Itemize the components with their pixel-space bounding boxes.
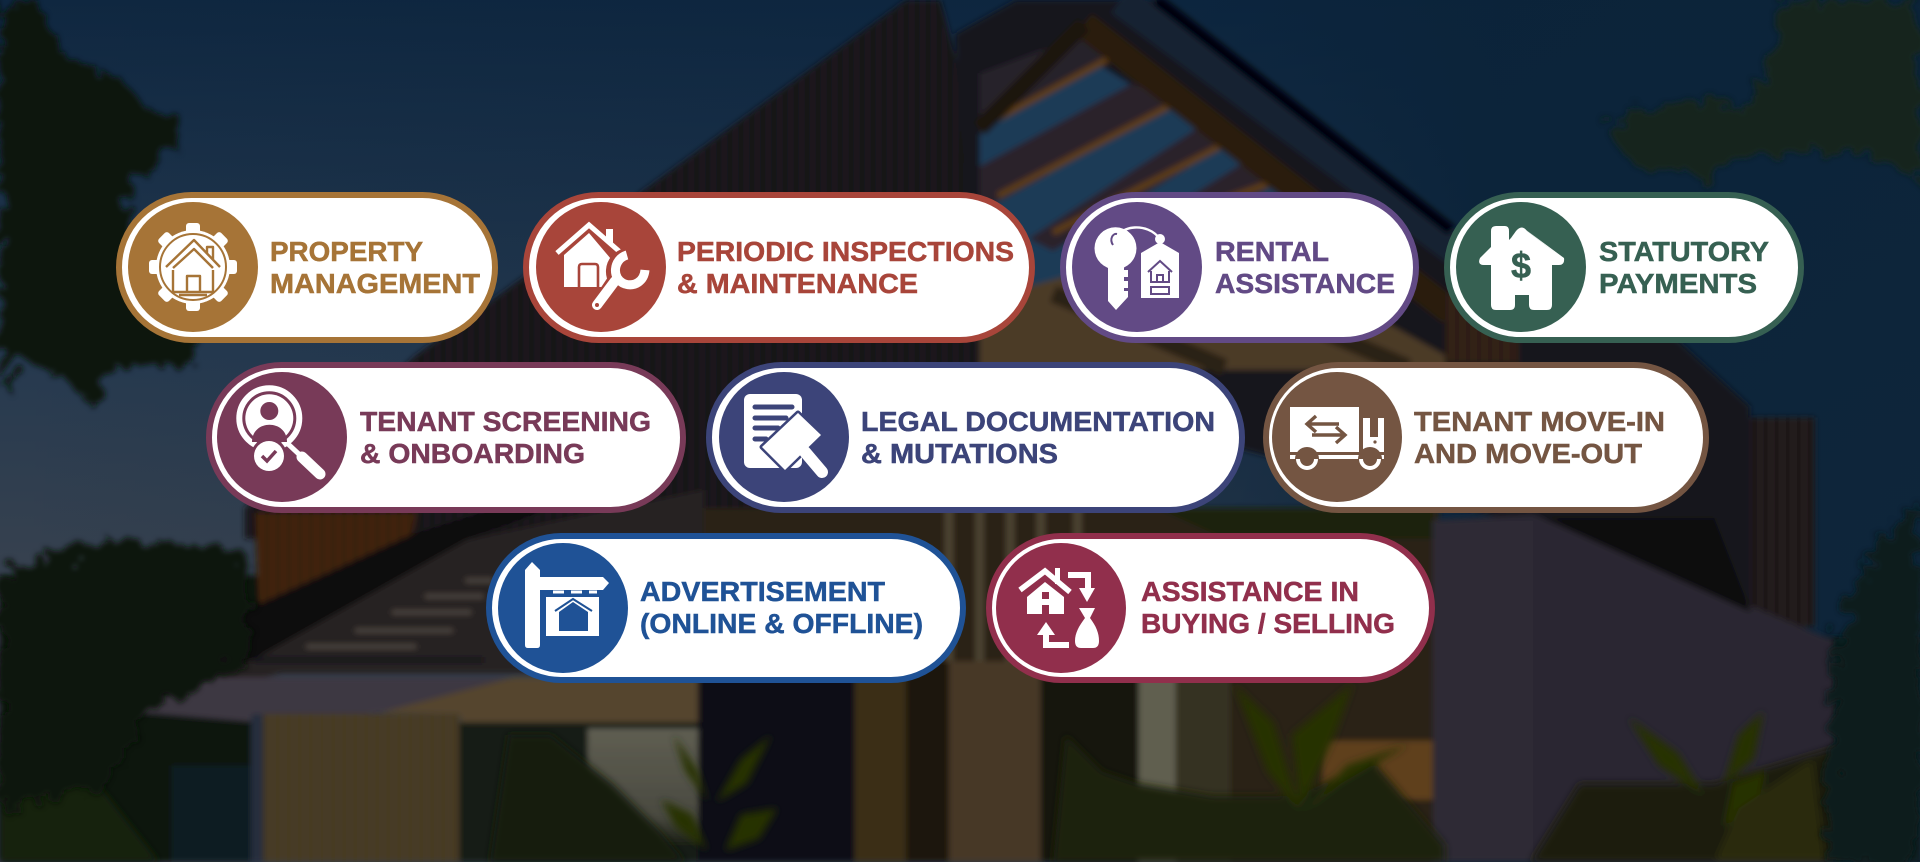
pill: statutory payments [1447,195,1801,340]
label [861,406,1215,469]
label: ASSISTANCE IN [1141,576,1359,607]
label [360,406,651,469]
label [1141,576,1395,639]
icon: magnifier with person [217,372,347,502]
label: (ONLINE & OFFLINE) [640,608,923,639]
label: ADVERTISEMENT [640,576,885,607]
label: MANAGEMENT [270,268,480,299]
label [640,576,923,639]
icon: house with dollar [1456,202,1586,332]
pill: legal documentation [709,365,1242,510]
icon: house with dollar: $ [1511,245,1531,286]
pill: advertisement [489,536,963,680]
label [1215,236,1395,299]
label: RENTAL [1215,236,1329,267]
pill: property management [119,195,495,340]
label: & MAINTENANCE [677,268,918,299]
label: PERIODIC INSPECTIONS [677,236,1014,267]
label [270,236,480,299]
icon: house and wrench [536,202,666,332]
pill: tenant screening [209,365,683,510]
icon: key and tag [1072,202,1202,332]
label: TENANT SCREENING [360,406,651,437]
pill: periodic inspections [526,195,1032,340]
label: LEGAL DOCUMENTATION [861,406,1215,437]
pill: rental assistance [1063,195,1416,340]
icon: moving truck [1272,372,1402,502]
label: PROPERTY [270,236,423,267]
label: BUYING / SELLING [1141,608,1395,639]
label [1599,236,1769,299]
label: & MUTATIONS [861,438,1058,469]
icon: hanging sign [498,543,628,673]
label: STATUTORY [1599,236,1769,267]
label: TENANT MOVE-IN [1414,406,1665,437]
pill: tenant move-in [1266,365,1706,510]
label [677,236,1014,299]
icon: gear house [128,202,258,332]
icon: house, arrows and money bag [996,543,1126,673]
label: ASSISTANCE [1215,268,1395,299]
label: AND MOVE-OUT [1414,438,1642,469]
label: PAYMENTS [1599,268,1757,299]
icon: document and stamp [719,372,849,502]
label: & ONBOARDING [360,438,585,469]
label [1414,406,1665,469]
pill: assistance buying selling [989,536,1432,680]
